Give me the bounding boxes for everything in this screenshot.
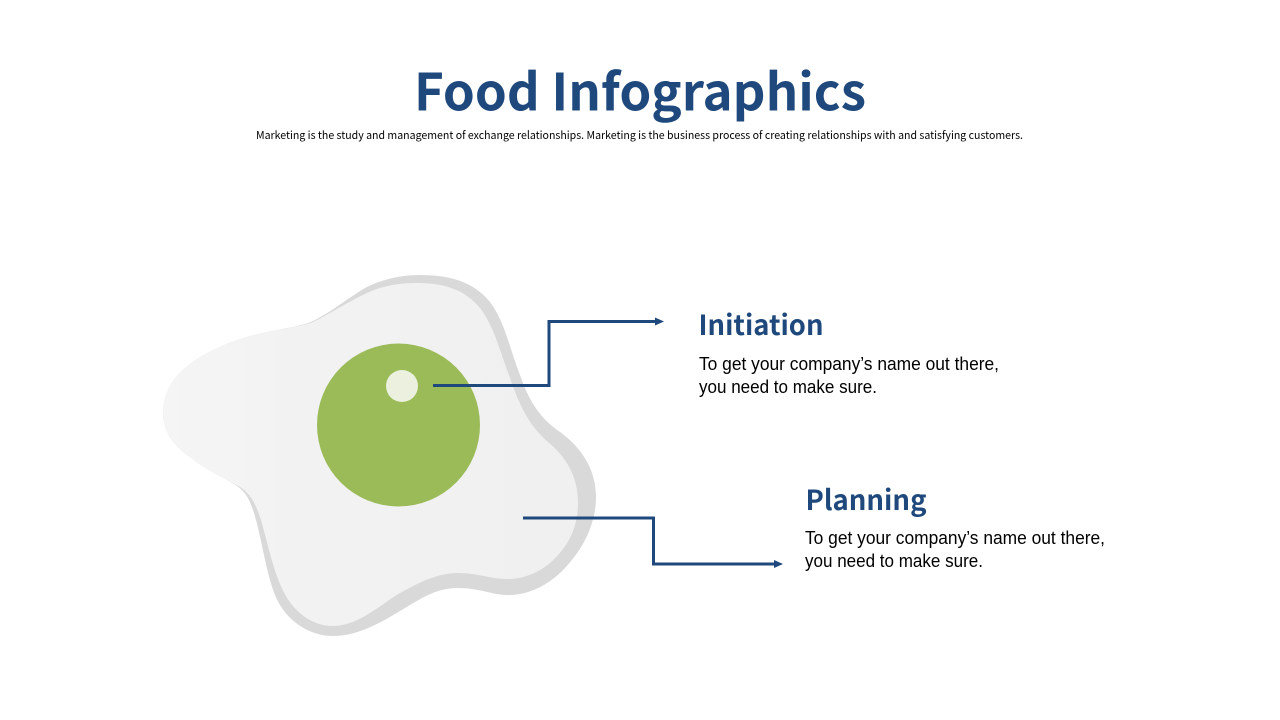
arrow: yolk to Initiation	[433, 318, 664, 386]
text block: Planning	[805, 479, 1105, 571]
egg white shadow rim	[163, 275, 596, 636]
arrow: white to Planning	[523, 518, 783, 568]
description: Planning: To get your company’s name out there,	[805, 528, 1105, 548]
egg white	[163, 283, 578, 626]
description: Initiation: you need to make sure.	[699, 377, 877, 397]
description: Planning: you need to make sure.	[805, 551, 983, 571]
text block: Initiation	[698, 304, 999, 397]
yolk	[317, 344, 480, 506]
description: Initiation: To get your company’s name out there,	[699, 354, 999, 374]
title: Food Infographics	[414, 52, 866, 126]
heading: Planning: Planning	[806, 479, 927, 519]
yolk highlight	[386, 370, 418, 402]
icon: fried egg	[163, 275, 596, 636]
subtitle: Marketing is the study and management of exchange relationships. Marketing is the business process of creating relationships with and satisfying customers.	[256, 127, 1023, 143]
heading: Initiation: Initiation	[698, 304, 824, 344]
